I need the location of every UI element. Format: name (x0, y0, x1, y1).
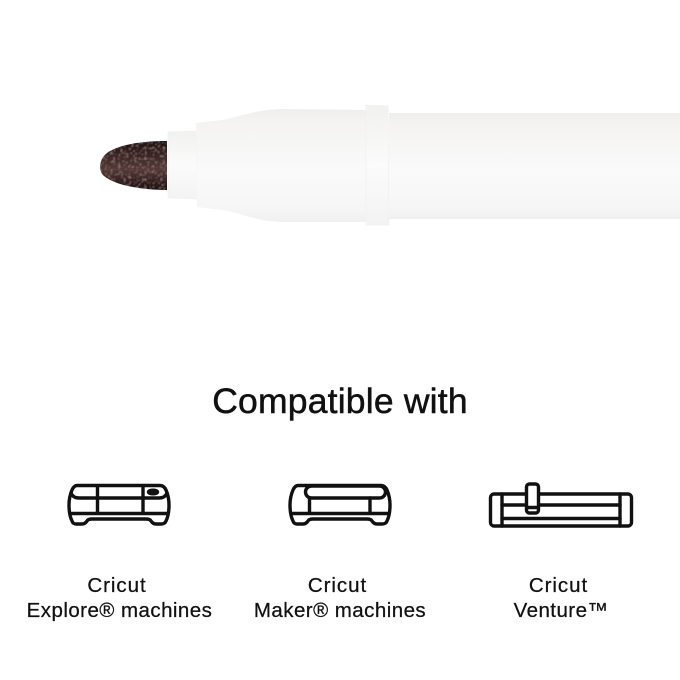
label: Cricut Explore machines (27, 574, 212, 622)
label: Cricut Explore machines: Explore® machines (27, 598, 212, 622)
label: Cricut Explore machines: Cricut (87, 574, 147, 597)
label: Cricut Maker machines: Cricut (308, 574, 367, 597)
label: Cricut Venture: Cricut (529, 574, 588, 597)
label: Cricut Venture: Venture™ (514, 598, 608, 622)
label: Cricut Maker machines: Maker® machines (254, 598, 426, 622)
label: Cricut Venture (514, 574, 608, 622)
marker illustration (100, 105, 680, 226)
marker barrel (389, 113, 680, 219)
marker tip (100, 141, 167, 190)
marker tapered section (196, 109, 366, 222)
heading: Compatible with (212, 381, 468, 421)
marker ring (366, 105, 389, 225)
marker collar (168, 131, 197, 199)
label: Cricut Maker machines (254, 574, 426, 622)
